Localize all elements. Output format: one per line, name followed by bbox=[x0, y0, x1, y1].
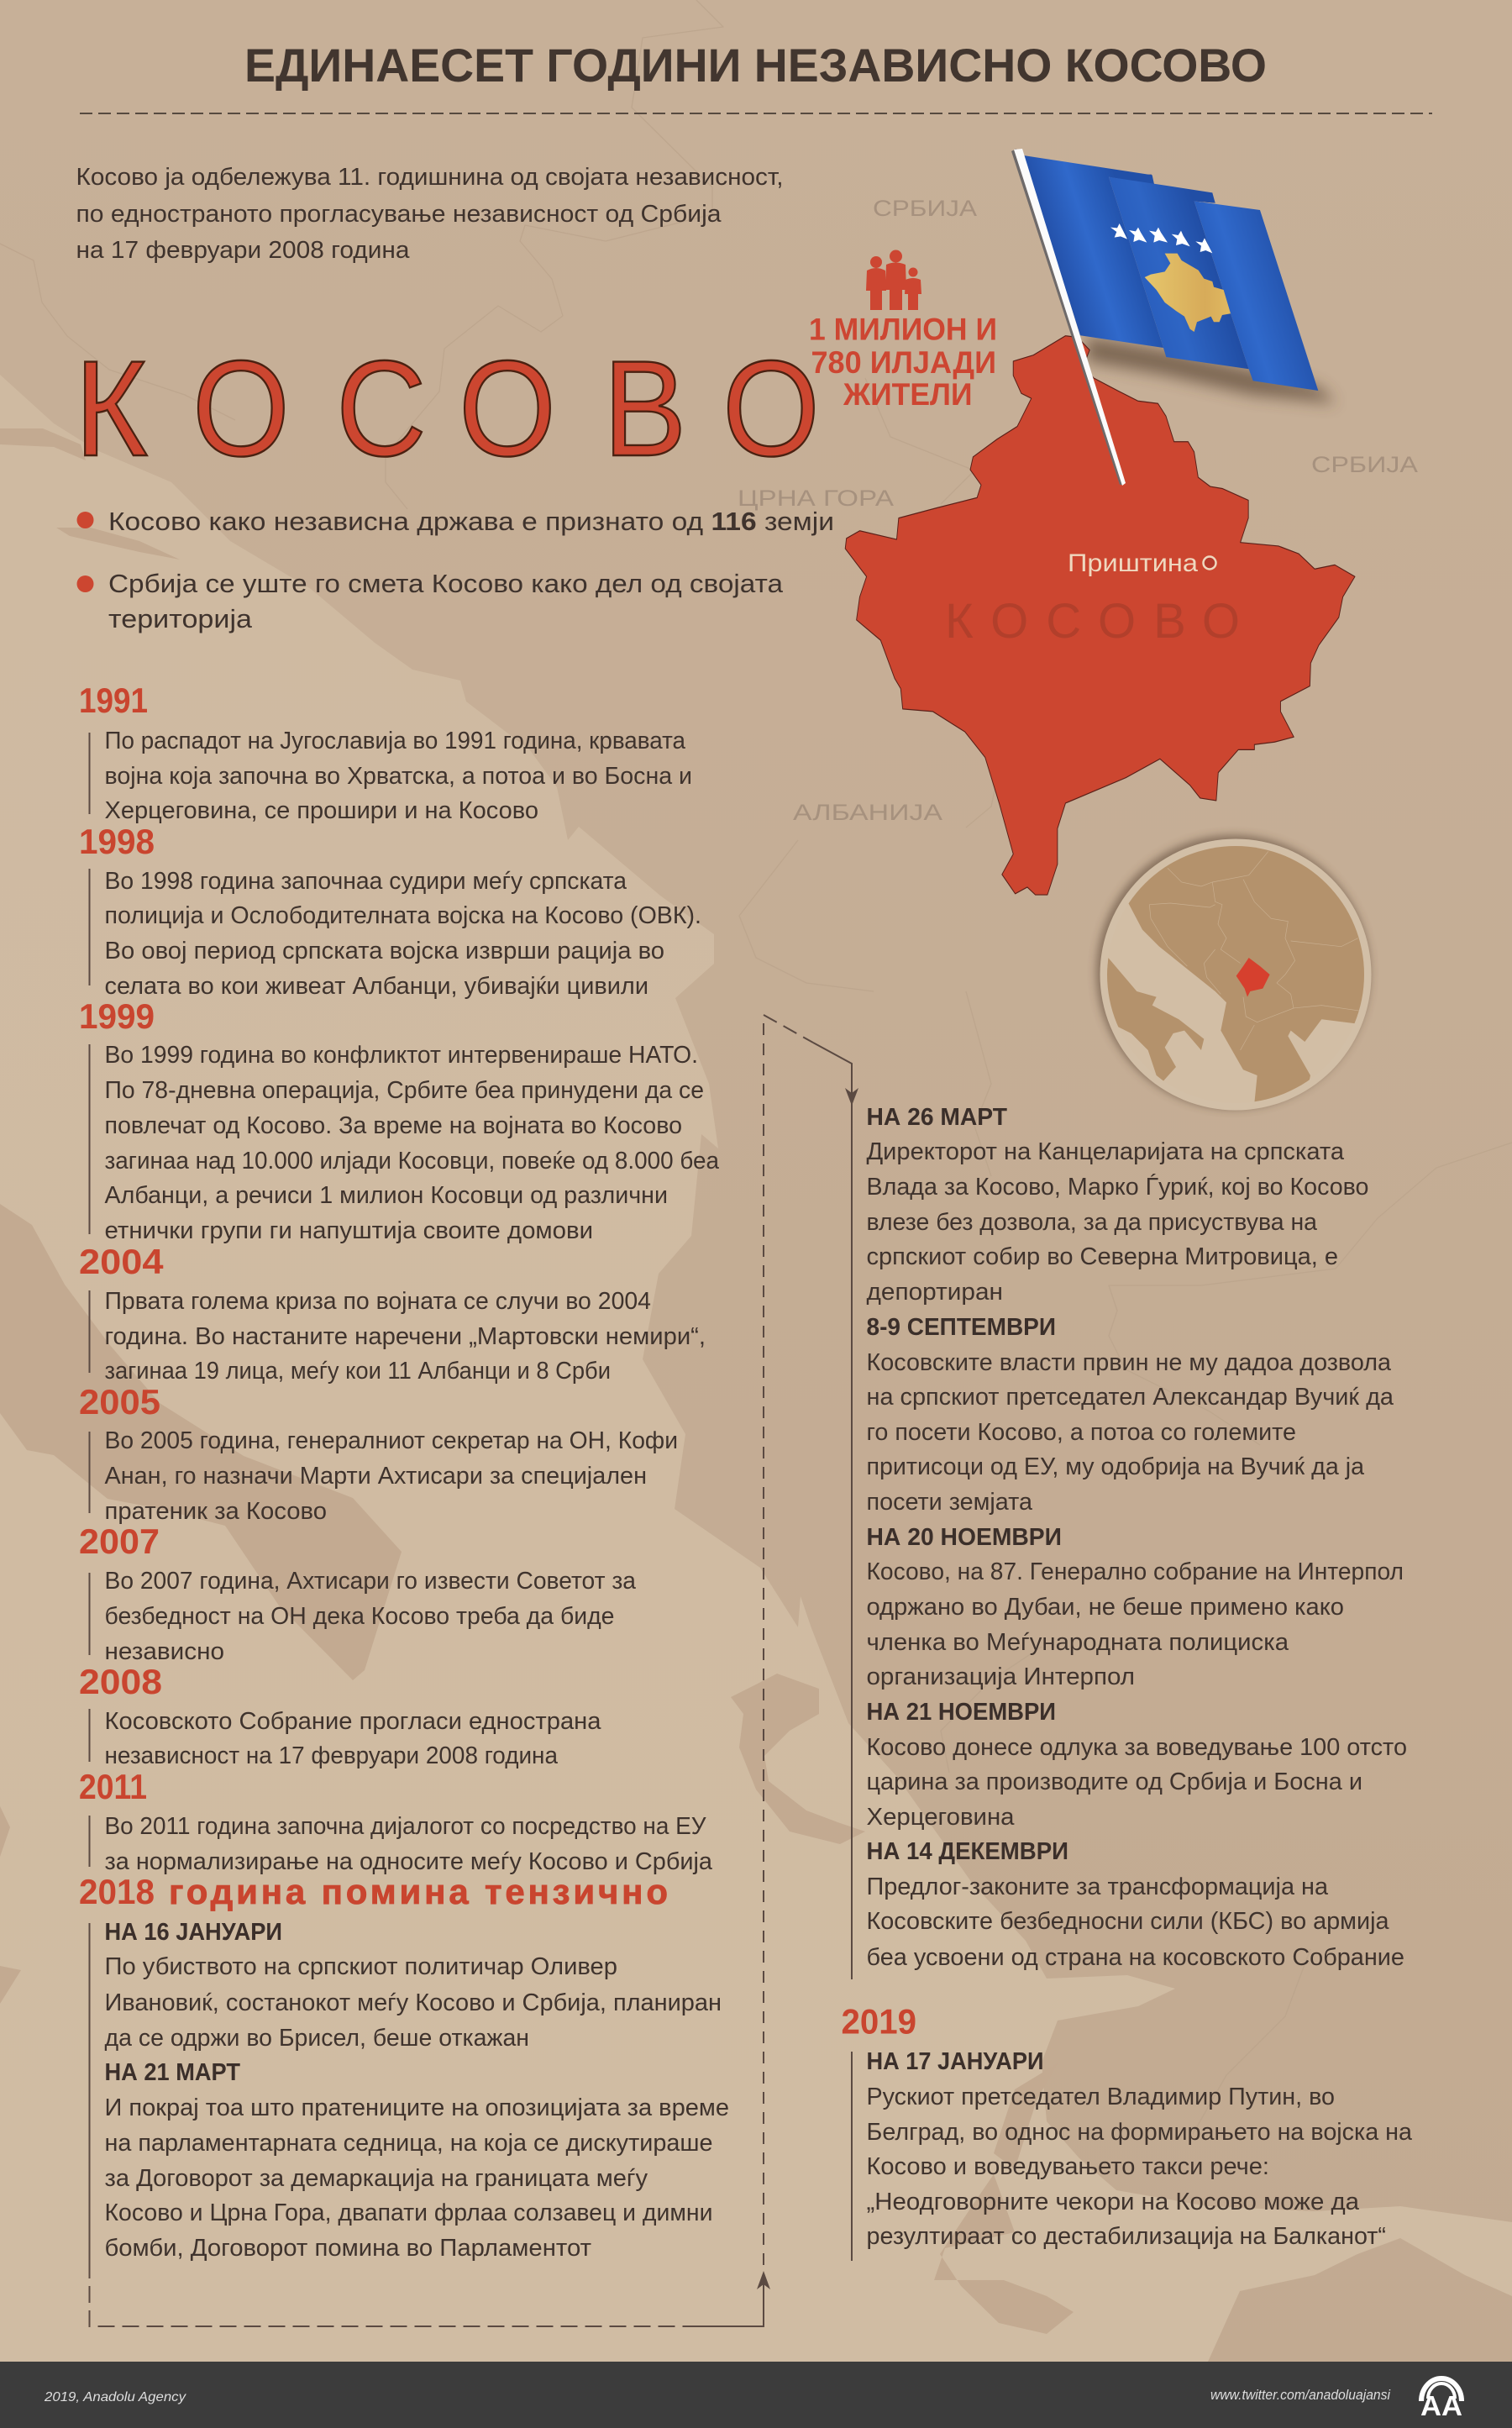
year 1998: селата во кои живеат Албанци, убивајќи цивили bbox=[104, 973, 648, 1000]
timeline column: 1991 to 2018 bbox=[79, 681, 729, 2262]
logo: Anadolu Agency: AA bbox=[1420, 2390, 1462, 2421]
8-9 September: притисоци од ЕУ, му одобрија на Вучиќ да ја bbox=[867, 1453, 1364, 1480]
year 1999 bbox=[79, 996, 719, 1244]
21 November: царина за производите од Србија и Босна и bbox=[867, 1768, 1362, 1795]
26 March: НА 26 МАРТ bbox=[867, 1104, 1008, 1131]
year 2019: резултираат со дестабилизација на Балканот“ bbox=[867, 2223, 1386, 2250]
year 1991 bbox=[79, 681, 692, 824]
year 2004: Првата голема криза по војната се случи во 2004 bbox=[104, 1288, 651, 1315]
year 2007: безбедност на ОН дека Косово треба да биде bbox=[104, 1603, 615, 1630]
year 2008: 2008 bbox=[79, 1662, 162, 1701]
8-9 September: 8-9 СЕПТЕМВРИ bbox=[867, 1314, 1056, 1341]
year 2019: Белград, во однос на формирањето на војска на bbox=[867, 2119, 1412, 2146]
intro text bbox=[76, 164, 784, 264]
year 1999: По 78-дневна операција, Србите беа принудени да се bbox=[104, 1077, 704, 1104]
intro text: по едностраното прогласување независност од Србија bbox=[76, 201, 722, 228]
year 2018: да се одржи во Брисел, беше откажан bbox=[104, 2025, 529, 2052]
year 2018: бомби, Договорот помина во Парламентот bbox=[104, 2235, 591, 2262]
year 2004: 2004 bbox=[79, 1242, 164, 1281]
year 2018: И покрај тоа што пратениците на опозицијата за време bbox=[104, 2094, 729, 2121]
population figure: 780 ИЛЈАДИ bbox=[811, 345, 996, 380]
20 November: одржано во Дубаи, не беше примено како bbox=[867, 1594, 1344, 1621]
year 2007: независно bbox=[104, 1638, 224, 1665]
year 2018: Косово и Црна Гора, двапати фрлаа солзавец и димни bbox=[104, 2199, 712, 2226]
footer bar bbox=[0, 2362, 1512, 2428]
year 2011: 2011 bbox=[79, 1767, 147, 1806]
year 2018: По убиството на српскиот политичар Оливер bbox=[104, 1953, 617, 1980]
year 2005 bbox=[79, 1382, 678, 1525]
map country labels bbox=[738, 196, 1418, 825]
8-9 September: посети земјата bbox=[867, 1489, 1032, 1516]
year 2018 bbox=[79, 1872, 729, 2262]
year 2018: година помина тензично bbox=[169, 1872, 668, 1911]
14 December: Предлог-законите за трансформација на bbox=[867, 1874, 1328, 1900]
year 2008: Косовското Собрание прогласи еднострана bbox=[104, 1708, 601, 1735]
Kosovo map shape bbox=[845, 336, 1355, 895]
year 2019: Рускиот претседател Владимир Путин, во bbox=[867, 2084, 1335, 2110]
26 March: депортиран bbox=[867, 1279, 1003, 1306]
intro text: на 17 февруари 2008 година bbox=[76, 237, 410, 264]
population figure: ЖИТЕЛИ bbox=[843, 377, 973, 412]
year 2008: независност на 17 февруари 2008 година bbox=[104, 1742, 558, 1769]
20 November: организација Интерпол bbox=[867, 1663, 1135, 1690]
arrow head up bbox=[757, 2271, 770, 2289]
year 2018: НА 16 ЈАНУАРИ bbox=[104, 1919, 282, 1946]
year 1999: загинаа над 10.000 илјади Косовци, повеќе од 8.000 беа bbox=[104, 1148, 719, 1175]
26 March: влезе без дозвола, за да присуствува на bbox=[867, 1209, 1317, 1236]
year 2005: 2005 bbox=[79, 1382, 160, 1422]
year 2019: Косово и воведувањето такси рече: bbox=[867, 2153, 1269, 2180]
Kosovo label on map: КОСОВО bbox=[945, 594, 1240, 649]
bullet points bbox=[77, 507, 834, 633]
21 November bbox=[867, 1699, 1407, 1831]
year 1991: Херцеговина, се прошири и на Косово bbox=[104, 797, 538, 824]
year 2018: на парламентарната седница, на која се дискутираше bbox=[104, 2130, 712, 2157]
20 November: Косово, на 87. Генерално собрание на Интерпол bbox=[867, 1558, 1404, 1585]
14 December bbox=[867, 1838, 1404, 1971]
year 2018: за Договорот за демаркација на границата меѓу bbox=[104, 2165, 648, 2192]
21 November: Косово донесе одлука за воведување 100 отсто bbox=[867, 1734, 1407, 1761]
year 1999: Во 1999 година во конфликтот интервенираше НАТО. bbox=[104, 1042, 698, 1069]
map country labels: СРБИЈА bbox=[873, 196, 977, 221]
year 2008 bbox=[79, 1662, 601, 1769]
big heading: Kosovo: КОСОВО bbox=[75, 332, 820, 484]
year 2004: загинаа 19 лица, меѓу кои 11 Албанци и 8 Срби bbox=[104, 1358, 611, 1385]
connector arrow between columns bbox=[89, 1015, 858, 2326]
year 2019: 2019 bbox=[842, 2001, 916, 2042]
bullet points: Косово како независна држава е признато од 116 земји bbox=[108, 507, 834, 536]
year 1998: Во овој период српската војска изврши рација во bbox=[104, 938, 664, 964]
26 March: српскиот собир во Северна Митровица, е bbox=[867, 1243, 1338, 1270]
credit: 2019, Anadolu Agency bbox=[44, 2390, 186, 2404]
8-9 September: на српскиот претседател Александар Вучиќ да bbox=[867, 1384, 1394, 1411]
8-9 September bbox=[867, 1314, 1394, 1516]
year 1999: 1999 bbox=[79, 996, 155, 1036]
year 1998: полиција и Ослободителната војска на Косово (ОВК). bbox=[104, 902, 701, 929]
year 1998: Во 1998 година започнаа судири меѓу српската bbox=[104, 868, 627, 895]
year 2018: Ивановиќ, состанокот меѓу Косово и Србија, планиран bbox=[104, 1989, 722, 2016]
21 November: НА 21 НОЕМВРИ bbox=[867, 1699, 1056, 1726]
year 2005: Во 2005 година, генералниот секретар на ОН, Кофи bbox=[104, 1427, 678, 1454]
year 2004: година. Во настаните наречени „Мартовски немири“, bbox=[104, 1323, 706, 1350]
social link: www.twitter.com/anadoluajansi bbox=[1210, 2387, 1391, 2403]
20 November: НА 20 НОЕМВРИ bbox=[867, 1524, 1062, 1551]
flag pole bbox=[1011, 149, 1126, 486]
year 1991: По распадот на Југославија во 1991 година, крвавата bbox=[104, 728, 685, 754]
year 1998: 1998 bbox=[79, 822, 155, 861]
year 2007 bbox=[79, 1521, 636, 1665]
flag of Kosovo bbox=[1011, 149, 1318, 486]
year 2011: за нормализирање на односите меѓу Косово и Србија bbox=[104, 1848, 712, 1875]
map country labels: ЦРНА ГОРА bbox=[738, 486, 894, 511]
year 2018: 2018 bbox=[79, 1872, 155, 1911]
intro text: Косово ја одбележува 11. годишнина од својата независност, bbox=[76, 164, 784, 191]
population icon bbox=[866, 250, 921, 310]
20 November bbox=[867, 1524, 1404, 1690]
year 2005: пратеник за Косово bbox=[104, 1498, 327, 1525]
capital: Pristina: Приштина bbox=[1068, 549, 1198, 577]
map country labels: СРБИЈА bbox=[1311, 452, 1418, 477]
14 December: беа усвоени од страна на косовското Собрание bbox=[867, 1944, 1404, 1971]
year 2007: Во 2007 година, Ахтисари го извести Советот за bbox=[104, 1568, 636, 1595]
8-9 September: го посети Косово, а потоа со големите bbox=[867, 1419, 1296, 1446]
year 2007: 2007 bbox=[79, 1521, 160, 1561]
year 1991: 1991 bbox=[79, 681, 148, 720]
year 1998 bbox=[79, 822, 701, 1000]
bullet points: територија bbox=[108, 604, 253, 633]
year 2005: Анан, го назначи Марти Ахтисари за специјален bbox=[104, 1463, 647, 1490]
year 1991: војна која започна во Хрватска, а потоа и во Босна и bbox=[104, 763, 692, 790]
locator map inset bbox=[1096, 823, 1372, 1111]
year 2004 bbox=[79, 1242, 706, 1385]
timeline column: 2018 continued bbox=[851, 1097, 1407, 1979]
26 March: Влада за Косово, Марко Ѓуриќ, кој во Косово bbox=[867, 1174, 1369, 1201]
14 December: Косовските безбедносни сили (КБС) во армија bbox=[867, 1908, 1389, 1935]
flag shadow bbox=[1086, 336, 1336, 403]
arrow head down bbox=[845, 1088, 858, 1106]
year 1999: Албанци, а речиси 1 милион Косовци од различни bbox=[104, 1182, 668, 1209]
population figure: 1 МИЛИОН И bbox=[809, 313, 997, 346]
21 November: Херцеговина bbox=[867, 1804, 1015, 1831]
26 March: Директорот на Канцеларијата на српската bbox=[867, 1138, 1344, 1165]
8-9 September: Косовските власти првин не му дадоа дозвола bbox=[867, 1349, 1391, 1376]
20 November: членка во Меѓународната полициска bbox=[867, 1629, 1289, 1656]
year 1999: етнички групи ги напуштија своите домови bbox=[104, 1217, 593, 1244]
bullet points: Србија се уште го смета Косово како дел од својата bbox=[108, 569, 784, 598]
year 2011: Во 2011 година започна дијалогот со посредство на ЕУ bbox=[104, 1813, 706, 1840]
14 December: НА 14 ДЕКЕМВРИ bbox=[867, 1838, 1068, 1865]
map country labels: АЛБАНИЈА bbox=[793, 800, 942, 825]
year 2018: НА 21 МАРТ bbox=[104, 2059, 241, 2086]
population figure bbox=[809, 313, 997, 412]
year 2019: НА 17 ЈАНУАРИ bbox=[867, 2048, 1043, 2075]
logo: Anadolu Agency bbox=[1420, 2378, 1462, 2421]
title: ЕДИНАЕСЕТ ГОДИНИ НЕЗАВИСНО КОСОВО bbox=[244, 39, 1267, 92]
year 2019: „Неодговорните чекори на Косово може да bbox=[867, 2189, 1359, 2215]
year 2019 bbox=[842, 2001, 1412, 2261]
year 1999: повлечат од Косово. За време на војната во Косово bbox=[104, 1112, 682, 1139]
year 2011 bbox=[79, 1767, 712, 1875]
26 March bbox=[867, 1104, 1369, 1306]
